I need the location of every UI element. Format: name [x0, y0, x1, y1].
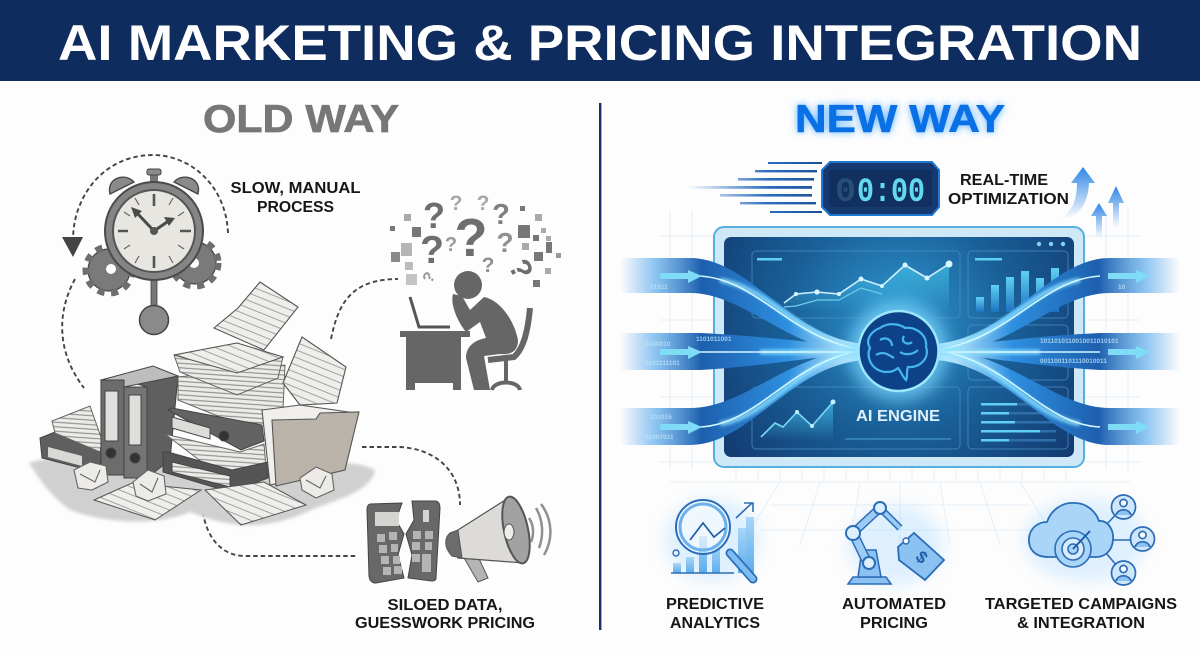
chair — [488, 308, 530, 390]
icon: digital timer: 0 — [835, 174, 856, 212]
label: targeted campaigns and integration — [985, 596, 1177, 632]
binary digits: 01007011 — [645, 434, 674, 441]
line chart — [757, 258, 952, 312]
icon: alarm clock with gears — [86, 169, 218, 334]
question marks: ? — [420, 229, 444, 272]
illustration: pile of paperwork — [29, 282, 375, 525]
left input streams — [620, 258, 865, 445]
panel: new way — [620, 98, 1180, 632]
binary digits — [645, 284, 1126, 441]
icon: robot arm with price tag — [846, 502, 944, 585]
label: targeted campaigns and integration: TARGETED CAMPAIGNS — [985, 596, 1177, 613]
question marks: ? — [454, 208, 488, 268]
question marks: ? — [496, 227, 514, 258]
question marks: ? — [450, 192, 462, 215]
label: predictive analytics — [666, 596, 764, 632]
heading: new way: NEW WAY — [795, 98, 1005, 141]
speed lines — [688, 162, 822, 213]
label: slow, manual process: SLOW, MANUAL — [230, 180, 360, 197]
desk — [400, 331, 470, 390]
icon: broken calculator — [367, 501, 440, 583]
icon: cloud target network — [1023, 495, 1154, 585]
flow glow — [720, 280, 1080, 424]
horizontal binder upper — [168, 408, 264, 450]
label: real-time optimization — [948, 172, 1069, 208]
icon: predictive analytics — [664, 498, 760, 582]
central paper stack — [178, 365, 285, 423]
label: targeted campaigns and integration: & INTEGRATION — [1017, 615, 1145, 632]
floor shadow — [29, 458, 375, 525]
ground papers — [94, 483, 201, 520]
heading: old way: OLD WAY — [203, 98, 399, 141]
icon: robot arm with price tag: $ — [912, 547, 932, 568]
flying page — [214, 282, 298, 350]
manila folder — [262, 405, 359, 486]
dashboard monitor — [714, 227, 1084, 467]
label: siloed data, guesswork pricing: GUESSWORK PRICING — [355, 615, 535, 632]
label: siloed data, guesswork pricing: SILOED DATA, — [388, 597, 502, 614]
icon: upward arrows — [1060, 167, 1124, 238]
label: ai engine: AI ENGINE — [856, 408, 940, 425]
question marks: ? — [445, 234, 457, 256]
binary digits: 0100010 — [645, 341, 671, 348]
flat binder — [40, 430, 102, 473]
background grid — [660, 210, 1140, 545]
window dots — [1037, 242, 1065, 246]
ai brain core — [848, 301, 948, 401]
mini line chart — [761, 400, 836, 440]
dashed process arrows — [62, 155, 460, 556]
icon: digital timer: 0:00 — [857, 174, 925, 212]
binary digits: 101015 — [650, 414, 672, 421]
icon: brain — [868, 324, 927, 380]
binary digits: 01011 — [650, 284, 668, 291]
data flow streams — [620, 258, 1180, 445]
label: real-time optimization: REAL-TIME — [960, 172, 1048, 189]
label: predictive analytics: PREDICTIVE — [666, 596, 764, 613]
question marks: ? — [502, 254, 539, 285]
question marks: ? — [420, 269, 439, 286]
question marks — [420, 192, 539, 286]
bright flow lines — [700, 276, 1100, 427]
label: automated pricing: PRICING — [860, 615, 928, 632]
data fragments — [390, 206, 561, 287]
binary digits: 1101011001 — [696, 336, 732, 343]
title banner: AI MARKETING & PRICING INTEGRATION — [58, 15, 1142, 71]
label: slow, manual process: PROCESS — [257, 199, 334, 216]
laptop — [410, 297, 450, 327]
label: real-time optimization: OPTIMIZATION — [948, 191, 1069, 208]
binary digits: 1011010110010011010101 — [1040, 338, 1119, 345]
question marks: ? — [482, 254, 494, 277]
icon: confused person at desk — [390, 192, 561, 390]
binary digits: 0101111101 — [645, 360, 680, 367]
question marks: ? — [477, 192, 489, 215]
horizontal binder lower — [163, 452, 268, 492]
binary digits: 0011001101110010011 — [1040, 358, 1107, 365]
label: predictive analytics: ANALYTICS — [670, 615, 760, 632]
right output streams — [935, 258, 1180, 445]
label: automated pricing — [842, 596, 946, 632]
label: slow, manual process — [230, 180, 360, 216]
audience nodes — [1112, 495, 1154, 585]
icon: digital timer — [822, 162, 939, 215]
label: siloed data, guesswork pricing — [355, 597, 535, 632]
loose stacked sheets — [165, 434, 266, 472]
crumpled paper balls — [74, 462, 334, 501]
label: automated pricing: AUTOMATED — [842, 596, 946, 613]
icon: megaphone — [446, 494, 550, 582]
small paper stack — [52, 406, 102, 452]
heading: new way: NEW WAY — [795, 98, 1005, 141]
question marks: ? — [423, 195, 445, 236]
question marks: ? — [492, 199, 510, 231]
center divider — [599, 103, 601, 630]
list bars — [981, 403, 1056, 442]
binary digits: 10 — [1118, 284, 1126, 291]
curled page — [283, 337, 346, 405]
upright binders — [101, 366, 178, 478]
title banner — [0, 0, 1200, 81]
head and body — [452, 271, 518, 390]
dashboard panels — [752, 251, 1068, 449]
panel: old way — [29, 98, 561, 632]
stream arrows — [660, 270, 1150, 434]
bar chart — [975, 258, 1059, 312]
